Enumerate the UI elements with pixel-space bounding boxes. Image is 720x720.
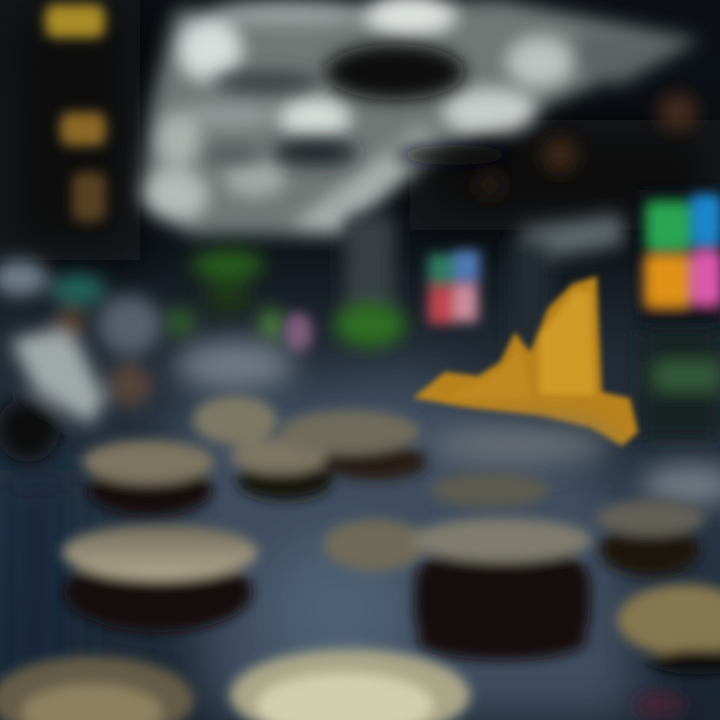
small colour screens bbox=[283, 250, 480, 352]
ceiling: grey structure bbox=[140, 0, 700, 236]
bottom right colour specks bbox=[634, 694, 686, 716]
people at left bbox=[0, 260, 162, 462]
orange area chart bbox=[413, 276, 638, 446]
mid grey walkway bbox=[175, 339, 720, 505]
bowl: large front left bbox=[62, 524, 258, 632]
bowls: back row bbox=[82, 396, 427, 516]
bowl: bottom centre bbox=[230, 649, 470, 720]
grey pillar and background panel bbox=[345, 214, 625, 350]
bowls: right group bbox=[323, 472, 705, 576]
ceiling: dark openings bbox=[205, 44, 515, 166]
yellow hanging lights bbox=[45, 4, 106, 222]
distant orange lights bbox=[476, 94, 698, 197]
lower dark screen bbox=[640, 330, 720, 440]
bowl: large front centre bbox=[412, 518, 592, 660]
bowl: front right bbox=[617, 584, 720, 674]
colour tile screen bbox=[640, 190, 720, 325]
bowl: bottom left bbox=[0, 656, 194, 720]
green plants bbox=[164, 249, 406, 347]
